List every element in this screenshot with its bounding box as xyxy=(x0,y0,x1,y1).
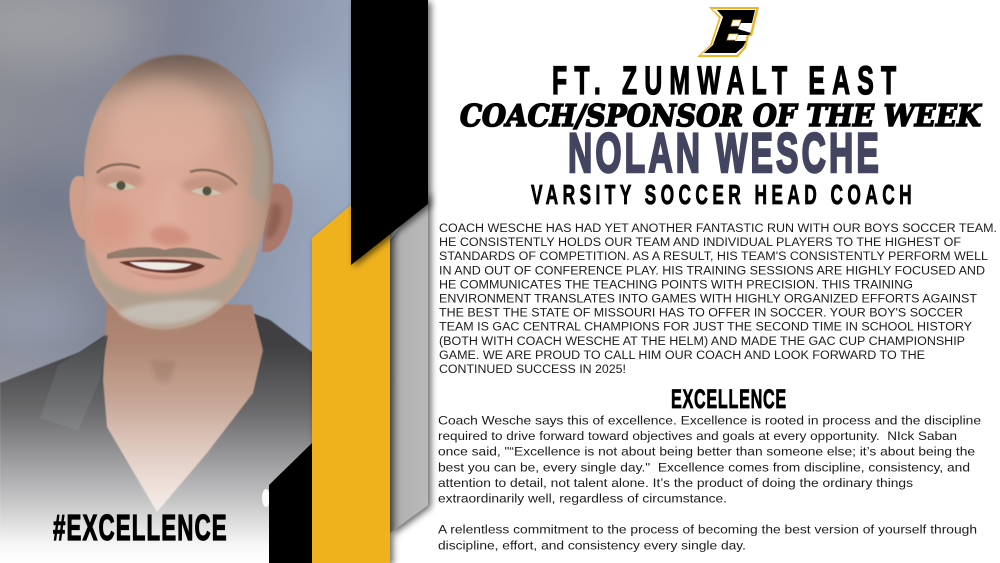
brows xyxy=(97,164,140,173)
top black band xyxy=(351,0,428,265)
coach role: VARSITY SOCCER HEAD COACH xyxy=(531,179,912,210)
neck and chest xyxy=(103,300,263,512)
nose xyxy=(150,226,190,246)
coach description: HE CONSISTENTLY HOLDS OUR TEAM AND INDIVIDUAL PLAYERS TO THE HIGHEST OF xyxy=(439,235,961,249)
shirt xyxy=(0,312,352,563)
excellence text: attention to detail, not talent alone. It’s the product of doing the ordinary things xyxy=(438,476,913,490)
coach description: TEAM IS GAC CENTRAL CHAMPIONS FOR JUST THE SECOND TIME IN SCHOOL HISTORY xyxy=(439,320,972,334)
coach description: CONTINUED SUCCESS IN 2025! xyxy=(439,362,626,376)
eye socket shading xyxy=(96,171,144,189)
coach description: STANDARDS OF COMPETITION. AS A RESULT, HIS TEAM'S CONSISTENTLY PERFORM WELL xyxy=(439,249,988,263)
moustache xyxy=(107,247,223,260)
hashtag: #EXCELLENCE xyxy=(53,509,227,548)
excellence text: required to drive forward toward objectives and goals at every opportunity. NIck Saban xyxy=(438,429,957,443)
eyes xyxy=(107,182,136,190)
coach description: GAME. WE ARE PROUD TO CALL HIM OUR COACH AND LOOK FORWARD TO THE xyxy=(439,348,925,362)
left ear xyxy=(70,176,86,240)
school logo: E xyxy=(697,7,759,57)
shirt logo xyxy=(262,489,270,507)
excellence text xyxy=(438,414,981,552)
head xyxy=(84,55,273,329)
excellence text: A relentless commitment to the process of becoming the best version of yourself through xyxy=(438,523,977,537)
coach description: IN AND OUT OF CONFERENCE PLAY. HIS TRAINING SESSIONS ARE HIGHLY FOCUSED AND xyxy=(439,263,985,277)
right ear xyxy=(262,184,293,252)
excellence text: Coach Wesche says this of excellence. Excellence is rooted in process and the discipline xyxy=(438,414,981,428)
gold band xyxy=(312,205,390,563)
gray band xyxy=(390,190,428,533)
coach description: THE BEST THE STATE OF MISSOURI HAS TO OFFER IN SOCCER. YOUR BOY'S SOCCER xyxy=(439,306,963,320)
bottom black band xyxy=(269,443,312,563)
stubble beard xyxy=(85,240,256,329)
coach description: ENVIRONMENT TRANSLATES INTO GAMES WITH HIGHLY ORGANIZED EFFORTS AGAINST xyxy=(439,292,977,306)
coach description xyxy=(439,221,997,376)
excellence text: extraordinarily well, regardless of circumstance. xyxy=(438,492,727,506)
portrait photo xyxy=(0,0,352,563)
coach description: HE COMMUNICATES THE TEACHING POINTS WITH PRECISION. THIS TRAINING xyxy=(439,277,913,291)
excellence text: discipline, effort, and consistency every single day. xyxy=(438,538,746,552)
coach description: COACH WESCHE HAS HAD YET ANOTHER FANTASTIC RUN WITH OUR BOYS SOCCER TEAM. xyxy=(439,221,997,235)
collar xyxy=(40,335,108,430)
coach description: (BOTH WITH COACH WESCHE AT THE HELM) AND MADE THE GAC CUP CHAMPIONSHIP xyxy=(439,334,965,348)
cheek xyxy=(88,203,136,247)
coach name: NOLAN WESCHE xyxy=(568,121,879,184)
excellence text: once said, "“Excellence is not about being better than someone else; it’s about being the xyxy=(438,445,975,459)
lower lip xyxy=(125,268,205,280)
smile and teeth xyxy=(119,259,205,273)
school name heading: FT. ZUMWALT EAST xyxy=(552,59,896,104)
excellence text: best you can be, every single day." Excellence comes from discipline, consistency, and xyxy=(438,460,970,474)
excellence heading: EXCELLENCE xyxy=(671,384,786,414)
